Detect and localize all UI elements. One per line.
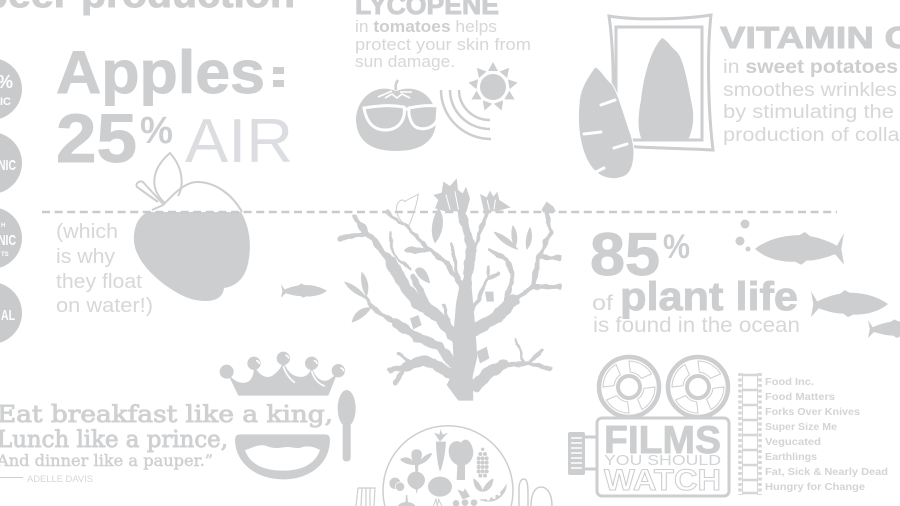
icon: tomato with sunglasses [356,80,438,151]
panel: organic badges: TS [1,252,9,258]
icon: floating apple [134,153,250,301]
panel: apples fact [56,39,293,317]
list: film titles: Vegucated [765,436,821,448]
panel: 85% plant life: of [592,292,613,315]
icon: small fish [281,284,327,298]
panel: organic badges: H [1,223,5,229]
panel: organic badges [0,58,22,344]
waterline [42,211,837,213]
icon: plate of vegetables [383,426,513,506]
panel: organic badges: AL [1,307,15,324]
icon: seaweed [340,178,560,401]
panel: vitamin C: in sweet potatoes [723,57,898,78]
panel: apples fact: % [140,110,173,152]
panel: apples fact: on water!) [56,295,153,317]
list: film titles: Earthlings [765,451,817,463]
icon: film camera: WATCH [604,464,721,497]
icon: bowl [235,434,330,479]
icon: film camera [568,357,729,497]
list: film titles: Fat, Sick & Nearly Dead [765,466,888,478]
icon: spoon [338,390,356,461]
panel: 85% plant life: 85 [590,221,660,288]
icon: fish swimming left [755,232,844,265]
panel: apples fact: they float [56,271,142,293]
panel: 85% plant life: plant life [620,275,798,319]
panel: vitamin C: smoothes wrinkles [723,80,897,101]
list: film titles [765,376,888,493]
panel: lycopene [355,0,531,71]
icon: fork [356,488,375,506]
panel: 85% plant life: % [663,228,690,266]
panel: 85% plant life [590,221,800,337]
icon: fish at right edge [868,319,900,338]
icon: film camera: FILMS [604,419,721,462]
icon: crown [220,352,345,396]
panel: lycopene: sun damage. [355,52,455,71]
list: film titles: Super Size Me [765,421,837,433]
panel: breakfast quote: Lunch like a prince, [0,427,228,453]
panel: 85% plant life: is found in the ocean [593,314,800,337]
panel: breakfast quote: Eat breakfast like a king, [0,402,333,428]
list: film titles: Hungry for Change [765,481,865,493]
panel: apples fact: 25 [56,100,137,177]
panel: apples fact: is why [56,246,115,268]
panel: breakfast quote [0,402,333,484]
panel: vitamin C: by stimulating the [723,102,894,123]
panel: breakfast quote: And dinner like a pauper.” [0,451,213,470]
panel: vitamin C: VITAMIN C [720,20,900,55]
panel: apples fact: Apples [56,39,265,106]
icon: knife and spoon [519,479,552,506]
panel: vitamin C [720,20,900,146]
panel: apples fact: AIR [185,107,293,176]
panel: lycopene: protect your skin from [355,35,531,54]
icon: film strip [740,373,760,495]
icon: sweet potatoes in frame [578,15,713,179]
list: film titles: Food Matters [765,391,835,403]
panel: apples fact: (which [56,221,118,243]
panel: breakfast quote: ADELLE DAVIS [27,474,93,484]
panel: organic badges: IC [0,96,11,108]
list: film titles: Forks Over Knives [765,406,860,418]
icon: sun and rays [441,62,518,139]
icon: film camera: YOU SHOULD [604,452,721,469]
icon: fish swimming right [811,290,888,317]
icon: bubbles [736,220,750,252]
list: film titles: Food Inc. [765,376,814,388]
panel: lycopene: in tomatoes helps [355,17,497,36]
